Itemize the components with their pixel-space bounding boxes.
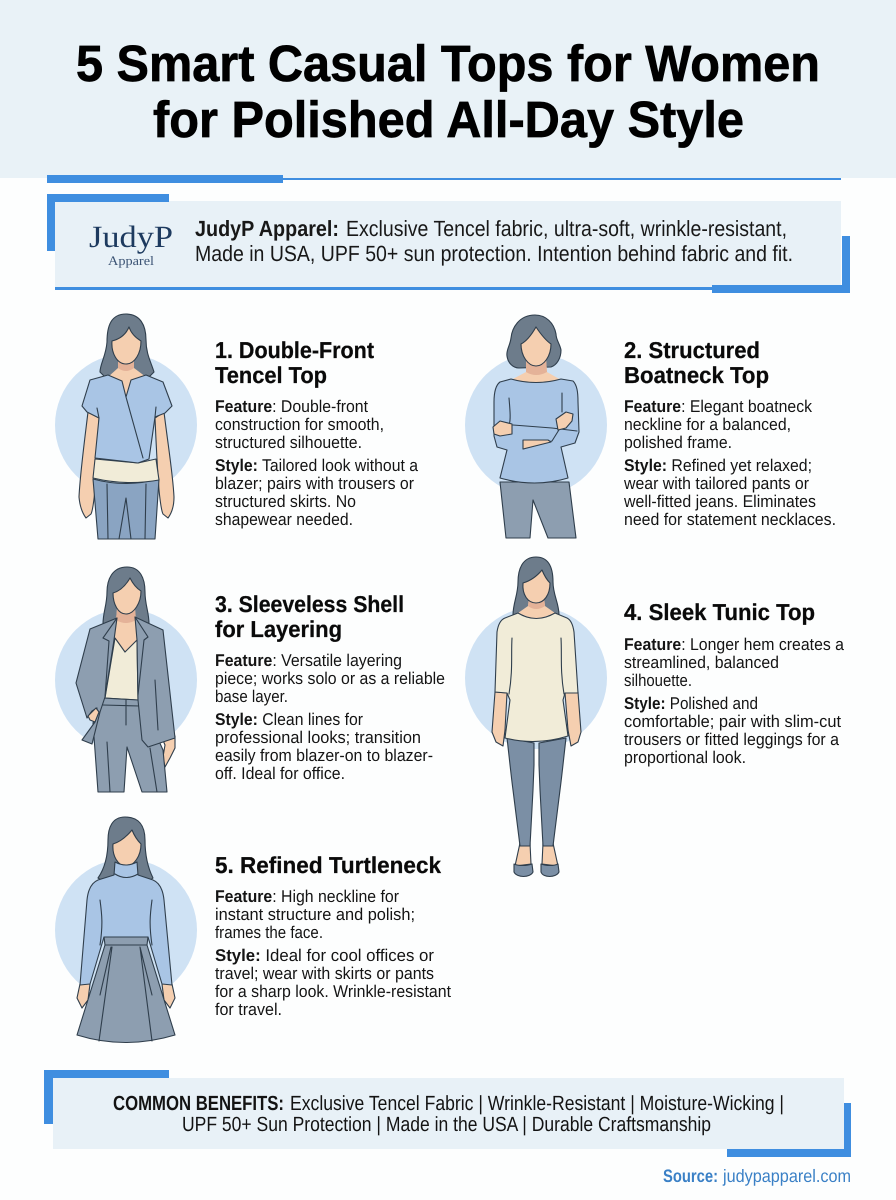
illustration: boatneck top bbox=[465, 315, 607, 538]
logo: JudyP Apparel: Apparel bbox=[108, 253, 154, 268]
illustration: shell with blazer bbox=[55, 567, 197, 792]
description 3: Feature: Versatile layering bbox=[215, 651, 402, 670]
description 5 bbox=[215, 887, 451, 1019]
description 2: well-fitted jeans. Eliminates bbox=[623, 492, 816, 511]
description 2: wear with tailored pants or bbox=[623, 474, 809, 493]
panel: item 5 refined turtleneck bbox=[55, 817, 451, 1042]
title banner bbox=[0, 0, 896, 178]
source line bbox=[663, 1166, 851, 1186]
heading 2: 2. Structured bbox=[624, 337, 760, 363]
description 5: Style: Ideal for cool offices or bbox=[215, 946, 434, 965]
description 3: professional looks; transition bbox=[215, 728, 421, 747]
description 5: for travel. bbox=[215, 1000, 282, 1019]
description 1 bbox=[215, 397, 419, 529]
description 2: Style: Refined yet relaxed; bbox=[624, 456, 812, 475]
illustration: turtleneck bbox=[55, 817, 197, 1042]
heading 1: Tencel Top bbox=[215, 362, 327, 388]
benefits text: COMMON BENEFITS: bbox=[113, 1092, 284, 1115]
description 4: trousers or fitted leggings for a bbox=[624, 730, 840, 749]
description 2: Feature: Elegant boatneck bbox=[624, 397, 812, 416]
panel: item 2 structured boatneck top bbox=[465, 315, 836, 538]
panel: brand intro bbox=[47, 194, 850, 293]
heading 5: 5. Refined Turtleneck bbox=[215, 852, 441, 878]
description 3: off. Ideal for office. bbox=[215, 764, 345, 783]
panel: common benefits bbox=[44, 1070, 851, 1157]
heading 1: 1. Double-Front bbox=[215, 337, 374, 363]
description 4: proportional look. bbox=[624, 748, 746, 767]
title: for Polished All-Day Style bbox=[153, 91, 744, 148]
description 2 bbox=[623, 397, 836, 529]
description 3: Style: Clean lines for bbox=[215, 710, 363, 729]
heading 3 bbox=[215, 591, 404, 642]
title bbox=[76, 35, 820, 148]
brand description bbox=[195, 216, 793, 266]
description 1: structured silhouette. bbox=[215, 433, 362, 452]
source line: judypapparel.com bbox=[722, 1166, 851, 1186]
heading 3: for Layering bbox=[215, 616, 342, 642]
source line: Source: bbox=[663, 1166, 718, 1186]
description 1: Feature: Double-front bbox=[215, 397, 368, 416]
description 3 bbox=[215, 651, 445, 783]
description 3: piece; works solo or as a reliable bbox=[215, 669, 445, 688]
description 4: Style: Polished and bbox=[624, 694, 758, 713]
heading 1 bbox=[215, 337, 374, 388]
heading 3: 3. Sleeveless Shell bbox=[215, 591, 404, 617]
brand description: JudyP Apparel: bbox=[195, 216, 339, 241]
logo: JudyP Apparel: JudyP bbox=[89, 219, 173, 254]
description 5: travel; wear with skirts or pants bbox=[215, 964, 434, 983]
heading 4: 4. Sleek Tunic Top bbox=[624, 599, 815, 625]
description 4: streamlined, balanced bbox=[624, 653, 779, 672]
description 4: comfortable; pair with slim-cut bbox=[624, 712, 841, 731]
description 1: Style: Tailored look without a bbox=[215, 456, 419, 475]
description 3: base layer. bbox=[215, 687, 288, 706]
description 5: Feature: High neckline for bbox=[215, 887, 399, 906]
illustration: double-front top bbox=[55, 314, 197, 539]
description 5: for a sharp look. Wrinkle-resistant bbox=[215, 982, 451, 1001]
brand description: Exclusive Tencel fabric, ultra-soft, wrinkle-resistant, bbox=[346, 216, 787, 241]
heading 2 bbox=[624, 337, 769, 388]
description 2: polished frame. bbox=[624, 433, 732, 452]
description 5: instant structure and polish; bbox=[215, 905, 415, 924]
description 4 bbox=[624, 635, 845, 767]
brand description: Made in USA, UPF 50+ sun protection. Intention behind fabric and fit. bbox=[195, 241, 793, 266]
illustration: tunic top bbox=[465, 557, 607, 876]
description 1: structured skirts. No bbox=[215, 492, 356, 511]
description 1: shapewear needed. bbox=[215, 510, 353, 529]
description 5: frames the face. bbox=[215, 923, 323, 942]
benefits text bbox=[113, 1092, 784, 1136]
description 2: need for statement necklaces. bbox=[624, 510, 836, 529]
panel: item 3 sleeveless shell bbox=[55, 567, 445, 792]
description 1: construction for smooth, bbox=[215, 415, 384, 434]
description 4: Feature: Longer hem creates a bbox=[624, 635, 845, 654]
description 3: easily from blazer-on to blazer- bbox=[215, 746, 433, 765]
title: 5 Smart Casual Tops for Women bbox=[76, 35, 820, 92]
heading 2: Boatneck Top bbox=[624, 362, 769, 388]
logo: JudyP Apparel bbox=[89, 219, 173, 268]
panel: item 1 double-front tencel top bbox=[55, 314, 419, 539]
description 4: silhouette. bbox=[624, 671, 692, 690]
panel: item 4 sleek tunic top bbox=[465, 557, 845, 876]
description 1: blazer; pairs with trousers or bbox=[215, 474, 414, 493]
benefits text: Exclusive Tencel Fabric | Wrinkle-Resistant | Moisture-Wicking | bbox=[290, 1092, 784, 1115]
description 2: neckline for a balanced, bbox=[624, 415, 791, 434]
benefits text: UPF 50+ Sun Protection | Made in the USA | Durable Craftsmanship bbox=[182, 1113, 711, 1136]
